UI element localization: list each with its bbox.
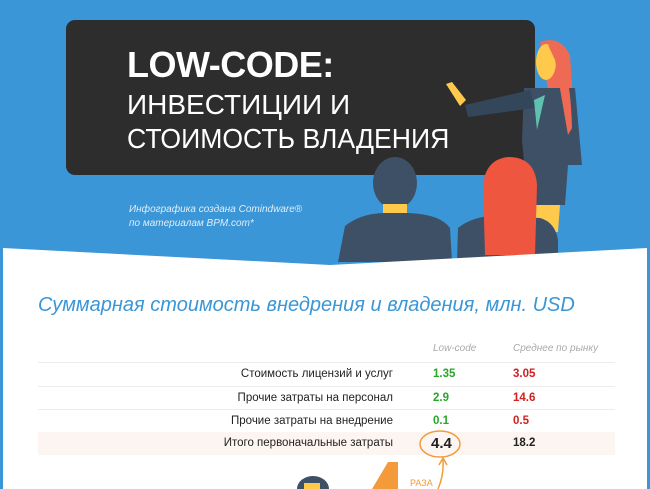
table <box>38 343 615 455</box>
presenter <box>540 40 575 140</box>
table: 0.5 <box>513 415 529 427</box>
table: 4.4 <box>431 435 452 452</box>
title: LOW-CODE: <box>127 44 334 85</box>
table: Итого первоначальные затраты <box>224 437 393 449</box>
man <box>373 157 417 209</box>
credit text <box>129 204 302 229</box>
table: 1.35 <box>433 368 455 380</box>
title: СТОИМОСТЬ ВЛАДЕНИЯ <box>127 123 449 154</box>
table: 2.9 <box>433 392 449 404</box>
table: 18.2 <box>513 437 535 449</box>
board <box>66 20 535 175</box>
red haired woman <box>457 216 558 262</box>
highlight circle and arrow: РАЗА <box>410 478 433 488</box>
section heading: Суммарная стоимость внедрения и владения, млн. USD <box>38 294 575 316</box>
table: Прочие затраты на внедрение <box>231 415 393 427</box>
big 4 <box>372 462 398 489</box>
table: 14.6 <box>513 392 535 404</box>
table: Стоимость лицензий и услуг <box>241 368 393 380</box>
column headers: Low-code <box>433 343 476 354</box>
title: ИНВЕСТИЦИИ И <box>127 89 350 120</box>
credit text: по материалам BPM.com* <box>129 218 254 229</box>
table: Среднее по рынку <box>513 343 598 354</box>
table: 0.1 <box>433 415 449 427</box>
credit text: Инфографика создана Comindware® <box>129 204 302 215</box>
table: 3.05 <box>513 368 535 380</box>
bottom person <box>297 476 329 489</box>
table: Прочие затраты на персонал <box>238 392 393 404</box>
title <box>127 44 449 154</box>
